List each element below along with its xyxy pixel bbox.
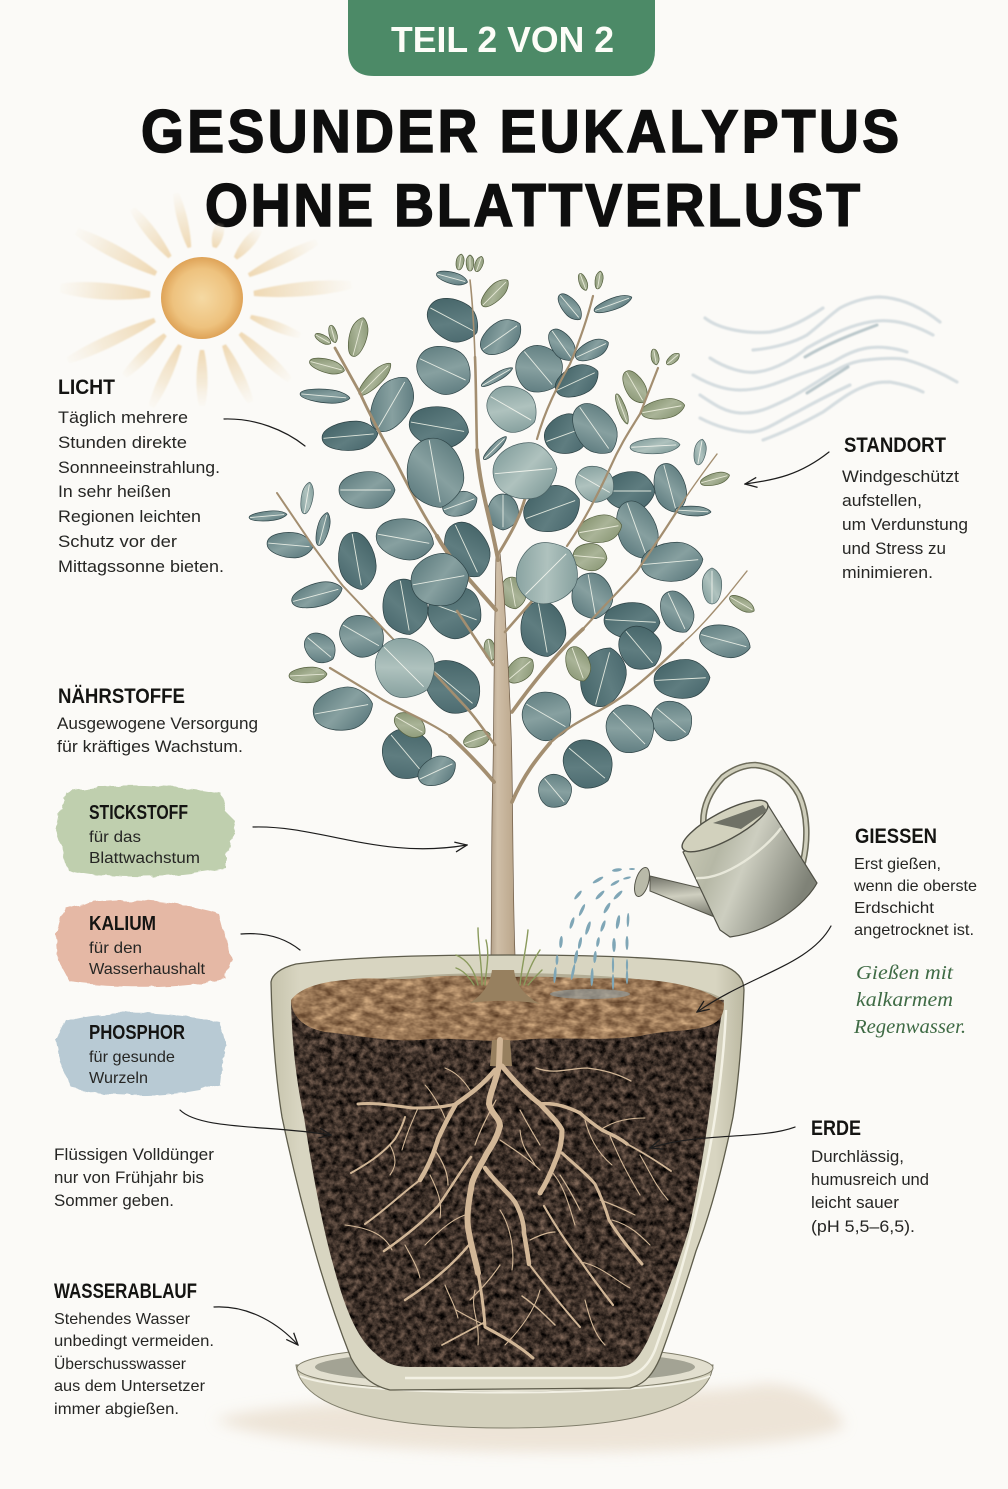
wasserablauf text block: Stehendes Wasser xyxy=(54,1311,191,1328)
trunk xyxy=(480,553,530,1002)
standort text block: STANDORT xyxy=(844,434,946,457)
canopy leaves behind the branches xyxy=(249,253,757,815)
puddle xyxy=(550,989,630,999)
swatch: kalium: KALIUM xyxy=(89,913,156,935)
wasserablauf text block: unbedingt vermeiden. xyxy=(54,1333,214,1350)
handwritten tip: Gießen mit xyxy=(856,962,953,984)
naehrstoffe text block: Ausgewogene Versorgung xyxy=(57,715,258,733)
wasserablauf text block: aus dem Untersetzer xyxy=(54,1378,206,1395)
naehrstoffe text block: für kräftiges Wachstum. xyxy=(57,738,243,756)
arrow: stickstoff xyxy=(253,827,467,849)
grass xyxy=(456,928,542,985)
standort text block: aufstellen, xyxy=(842,492,922,510)
foreground leaves xyxy=(363,377,591,710)
licht text block: Regionen leichten xyxy=(58,508,201,526)
swatch: stickstoff: STICKSTOFF xyxy=(89,802,188,824)
duenger text block: Sommer geben. xyxy=(54,1192,174,1210)
standort text block: Windgeschützt xyxy=(842,468,959,486)
branches xyxy=(277,280,747,802)
swatch: kalium: Wasserhaushalt xyxy=(89,961,206,978)
giessen text block: angetrocknet ist. xyxy=(854,922,974,939)
swatch: phosphor: für gesunde xyxy=(89,1049,175,1066)
giessen text block: Erst gießen, xyxy=(854,856,941,873)
erde text block: (pH 5,5–6,5). xyxy=(811,1218,915,1236)
tree xyxy=(249,253,757,1002)
wasserablauf text block: Überschusswasser xyxy=(54,1355,187,1373)
handwritten tip: Regenwasser. xyxy=(853,1016,966,1038)
handle xyxy=(703,765,806,862)
swatch: stickstoff xyxy=(56,785,236,877)
duenger text block: Flüssigen Volldünger xyxy=(54,1146,215,1164)
spout xyxy=(650,876,734,925)
arrow: giessen xyxy=(697,926,831,1012)
pot inner highlight xyxy=(405,1010,726,1378)
duenger text block xyxy=(54,1146,215,1210)
licht text block: Sonnneeinstrahlung. xyxy=(58,459,220,477)
erde text block: leicht sauer xyxy=(811,1194,900,1212)
soil xyxy=(285,985,730,1375)
duenger text block: nur von Frühjahr bis xyxy=(54,1169,204,1187)
giessen text block: Erdschicht xyxy=(854,900,935,917)
arrow: wasserablauf xyxy=(214,1307,298,1345)
licht text block: Stunden direkte xyxy=(58,434,187,452)
swatch: phosphor xyxy=(56,1013,226,1095)
title: OHNE BLATTVERLUST xyxy=(205,173,860,240)
naehrstoffe text block xyxy=(57,685,258,756)
wasserablauf text block: WASSERABLAUF xyxy=(54,1280,197,1303)
ground shadow xyxy=(215,1384,845,1452)
giessen text block xyxy=(853,825,977,939)
swatch: phosphor: Wurzeln xyxy=(89,1070,148,1087)
standort text block xyxy=(842,434,968,582)
arrow: licht xyxy=(224,419,305,446)
icon: wind xyxy=(693,297,957,440)
handwritten tip: kalkarmem xyxy=(856,989,953,1011)
standort text block: minimieren. xyxy=(842,564,933,582)
rim and opening xyxy=(676,791,774,861)
swatch: stickstoff: Blattwachstum xyxy=(89,850,200,867)
standort text block: und Stress zu xyxy=(842,540,946,558)
swatch: phosphor: PHOSPHOR xyxy=(89,1022,185,1044)
wasserablauf text block xyxy=(54,1280,214,1418)
licht text block: Mittagssonne bieten. xyxy=(58,558,224,576)
arrow: kalium xyxy=(241,934,300,950)
arrow: phosphor xyxy=(180,1110,331,1135)
erde text block: humusreich und xyxy=(811,1171,929,1189)
roots xyxy=(345,1040,671,1358)
handwritten tip xyxy=(853,962,966,1038)
erde text block: ERDE xyxy=(811,1117,861,1140)
title: GESUNDER EUKALYPTUS xyxy=(141,99,899,166)
naehrstoffe text block: NÄHRSTOFFE xyxy=(58,685,185,708)
licht text block xyxy=(58,376,224,576)
wasserablauf text block: immer abgießen. xyxy=(54,1401,179,1418)
top soil layer xyxy=(291,976,724,1041)
title xyxy=(141,99,899,240)
licht text block: Täglich mehrere xyxy=(58,409,188,427)
swatch: kalium: für den xyxy=(89,940,142,957)
water drops xyxy=(553,868,635,990)
erde text block: Durchlässig, xyxy=(811,1148,904,1166)
licht text block: Schutz vor der xyxy=(58,533,178,551)
trunk base and taproot xyxy=(470,970,540,1066)
saucer xyxy=(296,1344,713,1428)
swatch: stickstoff: für das xyxy=(89,829,141,846)
banner: Teil 2 von 2: TEIL 2 VON 2 xyxy=(391,19,614,60)
watering can xyxy=(632,765,817,937)
licht text block: In sehr heißen xyxy=(58,483,171,501)
banner: Teil 2 von 2 xyxy=(348,0,655,76)
licht text block: LICHT xyxy=(58,376,115,399)
arrow: erde xyxy=(650,1127,795,1148)
swatch: kalium xyxy=(56,900,232,987)
erde text block xyxy=(811,1117,929,1236)
body xyxy=(683,805,817,937)
giessen text block: wenn die oberste xyxy=(853,878,977,895)
giessen text block: GIESSEN xyxy=(855,825,937,848)
arrow: standort xyxy=(745,452,829,484)
icon: sun xyxy=(60,192,352,409)
standort text block: um Verdunstung xyxy=(842,516,968,534)
pot xyxy=(271,928,744,1390)
